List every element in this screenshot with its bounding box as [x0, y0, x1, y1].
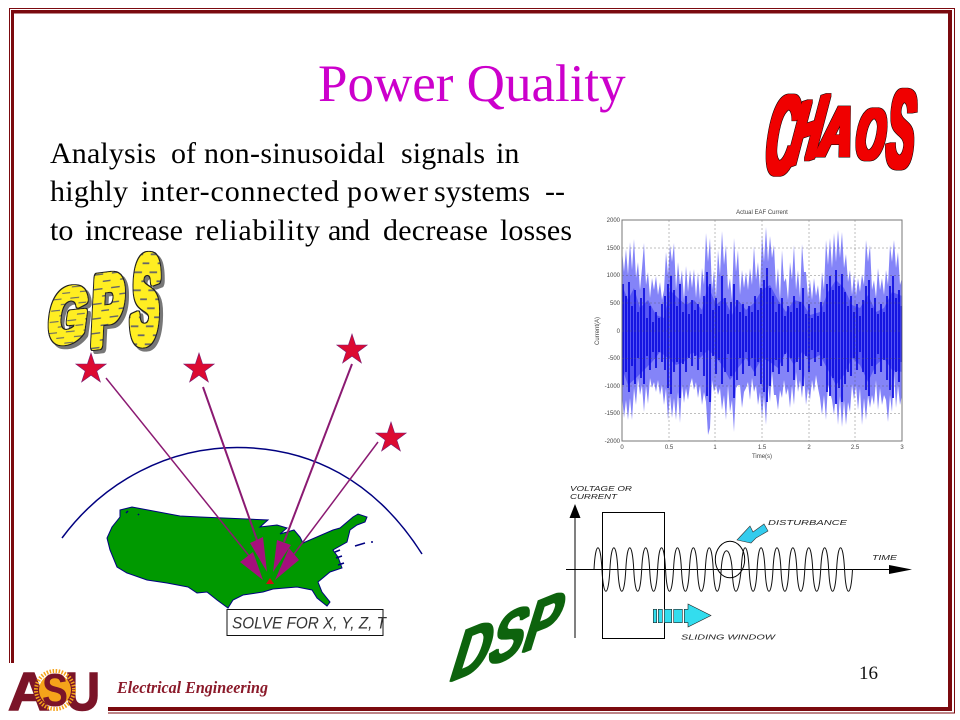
wordart: GPS: G — [44, 271, 93, 359]
ASU logo — [8, 662, 100, 720]
x axis labels: 0.5 — [665, 445, 674, 451]
body text: inter-connected — [141, 175, 339, 208]
wordart: GPS: S — [127, 233, 164, 368]
department name: Electrical Engineering — [116, 678, 268, 697]
y axis labels: -1500 — [605, 411, 621, 417]
y axis labels: -2000 — [605, 439, 621, 445]
signal arrows — [106, 364, 378, 580]
body text: signals — [401, 137, 485, 170]
body text: Analysis — [50, 137, 156, 170]
body text: systems — [434, 175, 530, 208]
disturbance circle — [715, 541, 745, 578]
y axis label: VOLTAGE OR — [570, 486, 632, 493]
body text: -- — [545, 175, 565, 208]
x axis labels: 1 — [713, 445, 717, 451]
x axis labels: 2.5 — [851, 445, 860, 451]
signal diagram — [566, 486, 912, 642]
x axis labels: 2 — [807, 445, 811, 451]
disturbance label: DISTURBANCE — [768, 520, 847, 527]
y axis labels: 500 — [610, 301, 621, 307]
sine wave with disturbance — [594, 548, 853, 591]
earth arc — [62, 448, 422, 554]
x axis labels: 3 — [900, 445, 904, 451]
chart title: Actual EAF Current — [736, 210, 788, 216]
x axis labels: 1.5 — [758, 445, 767, 451]
y axis labels — [605, 218, 621, 445]
wordart: CHAOS — [758, 63, 923, 201]
y axis labels: -1000 — [605, 384, 621, 390]
y axis label: CURRENT — [570, 494, 618, 501]
plot box — [622, 220, 902, 441]
sliding window box — [602, 512, 664, 638]
sun — [36, 671, 74, 709]
map: continental United States — [107, 507, 373, 608]
body text — [50, 137, 572, 247]
line chart: actual EAF current — [595, 210, 904, 460]
waveform core — [622, 280, 902, 385]
y axis labels: 0 — [617, 329, 621, 335]
wordart: CHAOS: H — [780, 74, 837, 187]
y axis labels: -500 — [608, 356, 621, 362]
body text: highly — [50, 175, 128, 208]
sliding window arrow — [653, 604, 711, 627]
wordart: CHAOS: C — [758, 72, 808, 201]
body text: reliability — [195, 214, 320, 247]
body text: and — [328, 214, 370, 247]
body text: to — [50, 214, 73, 247]
body text: increase — [85, 214, 183, 247]
wordart: CHAOS: A — [811, 93, 865, 172]
time label: TIME — [872, 555, 897, 562]
waveform dark cycles — [623, 268, 902, 404]
disturbance arrow — [737, 524, 768, 543]
y axis labels: 2000 — [607, 218, 621, 224]
y axis title: Current(A) — [595, 317, 601, 345]
wordart: GPS — [44, 233, 164, 368]
satellites — [76, 334, 406, 451]
solve label box — [227, 610, 387, 636]
sliding window label: SLIDING WINDOW — [681, 634, 777, 642]
wordart: CHAOS: O — [850, 94, 892, 177]
title: Power Quality — [318, 55, 626, 113]
body text: decrease — [383, 214, 488, 247]
y axis label — [570, 486, 632, 501]
wordart: GPS: P — [89, 255, 126, 368]
x axis labels: Time(s) — [752, 454, 772, 460]
x axis labels: 0 — [620, 445, 624, 451]
plot grid — [622, 220, 902, 441]
x axis labels — [620, 445, 904, 460]
body text: of — [171, 137, 196, 170]
page number: 16 — [859, 663, 878, 684]
body text: power — [347, 175, 428, 208]
body text: in — [496, 137, 519, 170]
body text: losses — [500, 214, 572, 247]
y axis labels: 1000 — [607, 273, 621, 279]
solve label box: SOLVE FOR X, Y, Z, T — [232, 614, 387, 632]
y axis arrow — [570, 504, 580, 638]
ASU logo: S — [42, 664, 68, 716]
y axis labels: 1500 — [607, 246, 621, 252]
waveform envelope — [622, 227, 902, 435]
receiver marker — [266, 578, 274, 584]
time axis arrow — [566, 565, 912, 574]
body text: non-sinusoidal — [204, 137, 385, 170]
wordart: DSP: DSP — [442, 573, 575, 699]
GPS diagram — [62, 334, 422, 636]
wordart: CHAOS: S — [881, 63, 923, 194]
